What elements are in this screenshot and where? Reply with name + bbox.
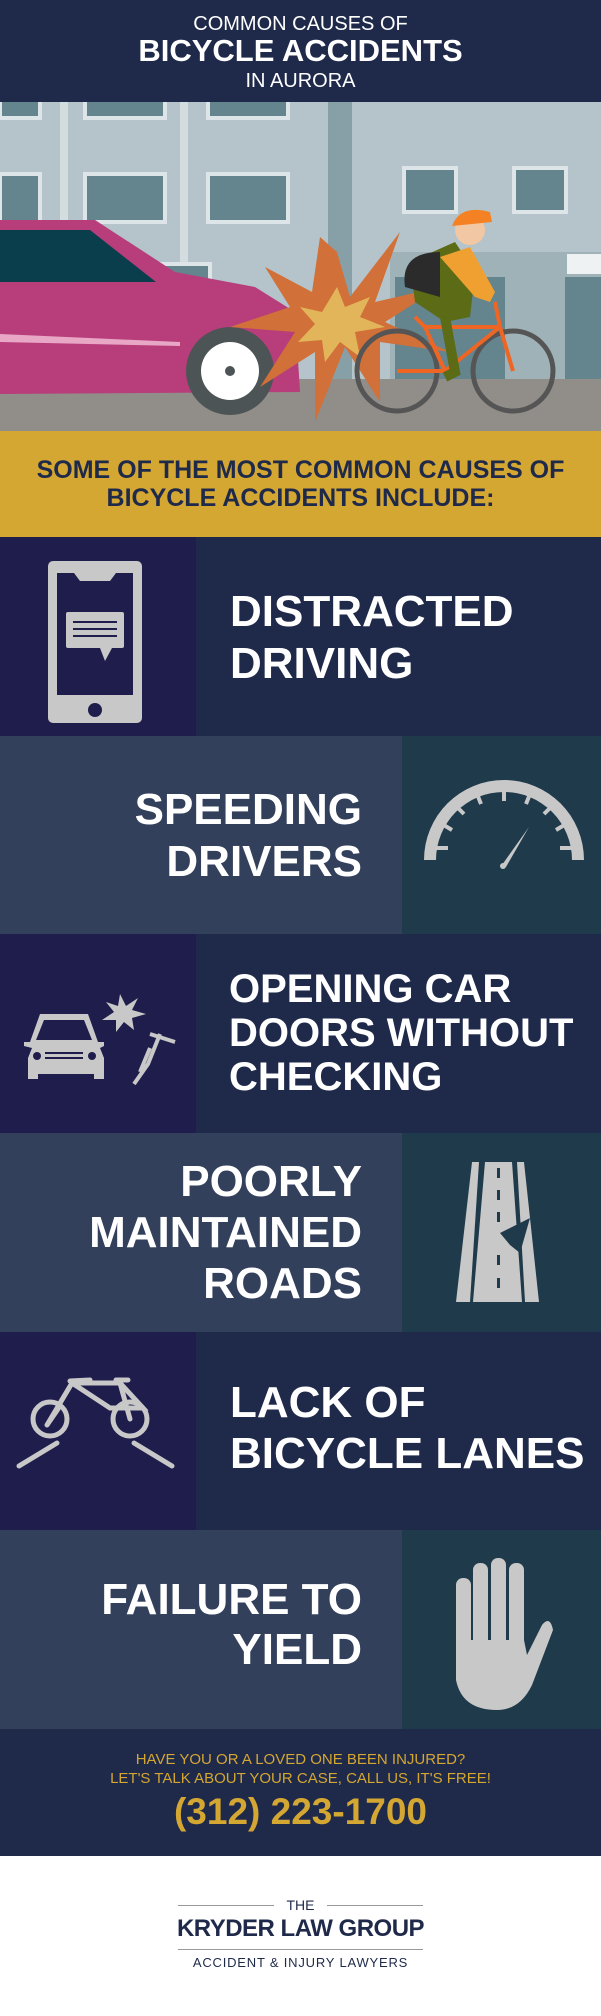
panel: speeding drivers [0, 736, 601, 935]
icon: phone [0, 537, 196, 736]
cta text: LET'S TALK ABOUT YOUR CASE, CALL US, IT'S FREE! [110, 1770, 491, 1787]
explosion [230, 232, 450, 422]
icon: hand [402, 1530, 601, 1729]
cta text [110, 1751, 491, 1787]
panel: opening car doors [0, 934, 601, 1133]
logo: KRYDER LAW GROUP [177, 1915, 424, 1942]
text [229, 967, 573, 1099]
text: DRIVING [230, 639, 413, 688]
text: BICYCLE LANES [230, 1429, 584, 1478]
header [0, 0, 601, 102]
logo [177, 1897, 424, 1970]
car [0, 220, 300, 415]
text: LACK OF [230, 1378, 426, 1427]
text: DOORS WITHOUT [229, 1011, 573, 1055]
icon: bicycle lane [0, 1332, 196, 1530]
footer call to action [0, 1729, 601, 1856]
intro banner: SOME OF THE MOST COMMON CAUSES OF [37, 456, 564, 484]
title main: BICYCLE ACCIDENTS [138, 33, 463, 68]
logo: ACCIDENT & INJURY LAWYERS [193, 1955, 408, 1970]
text [135, 785, 362, 886]
text: OPENING CAR [229, 967, 511, 1011]
panel: poorly maintained roads [0, 1133, 601, 1332]
icon: speedometer [402, 736, 601, 934]
title line 1: COMMON CAUSES OF [193, 13, 408, 35]
text: POORLY [180, 1157, 362, 1206]
text: CHECKING [229, 1055, 442, 1099]
text: SPEEDING [135, 785, 362, 834]
panel: lack of bicycle lanes [0, 1332, 601, 1531]
logo: THE [286, 1897, 314, 1913]
text [101, 1575, 362, 1674]
text: DISTRACTED [230, 587, 514, 636]
text: FAILURE TO [101, 1575, 362, 1624]
icon: road [402, 1133, 601, 1332]
text: MAINTAINED [89, 1208, 362, 1257]
text [89, 1157, 362, 1308]
phone number: (312) 223-1700 [174, 1791, 427, 1832]
panel: distracted driving [0, 537, 601, 736]
cta text: HAVE YOU OR A LOVED ONE BEEN INJURED? [136, 1751, 465, 1768]
hero illustration [0, 102, 601, 431]
text: ROADS [203, 1259, 362, 1308]
cyclist [357, 210, 553, 411]
text: DRIVERS [166, 837, 362, 886]
intro banner: BICYCLE ACCIDENTS INCLUDE: [107, 484, 494, 512]
intro banner [0, 431, 601, 537]
title line 3: IN AURORA [245, 70, 356, 92]
panel: failure to yield [0, 1530, 601, 1729]
icon: car and bike [0, 934, 196, 1133]
text [230, 587, 514, 688]
text: YIELD [232, 1625, 362, 1674]
text [230, 1378, 584, 1478]
